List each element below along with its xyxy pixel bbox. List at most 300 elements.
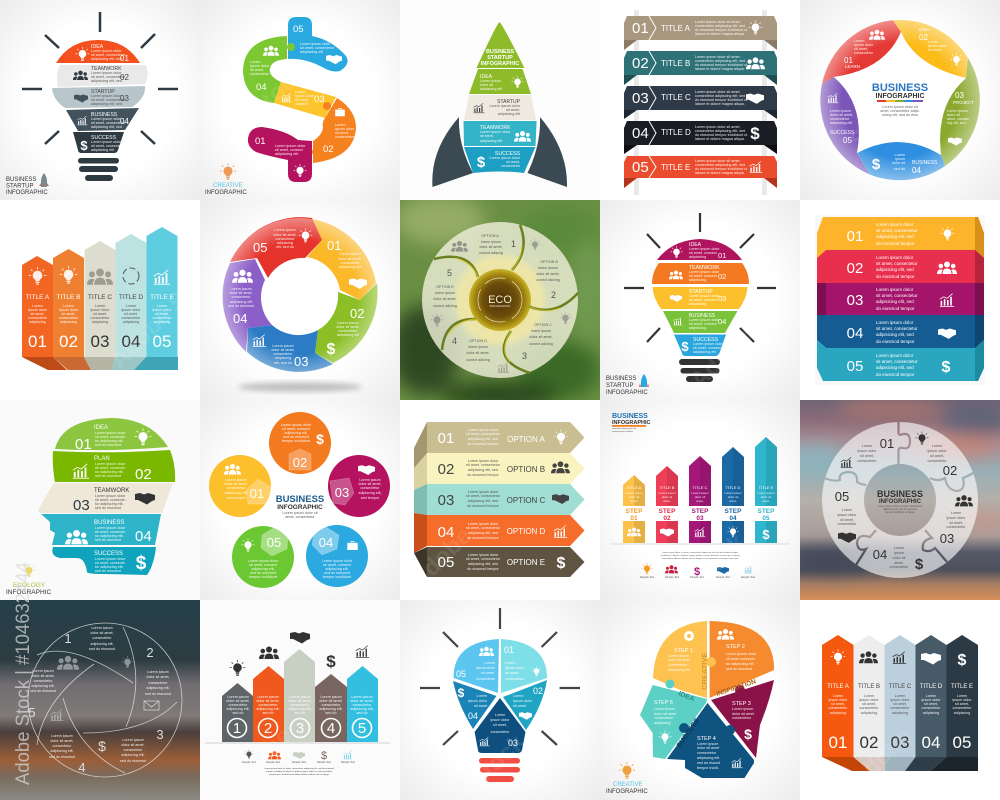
panel: step arrows: eiusmod tempor incididunt (612, 430, 633, 433)
panel: option arrows: OPTION A (507, 435, 546, 444)
panel: head bands: tur adipiscing elit, (95, 565, 124, 569)
panel: dollar sign puzzle: 03 (314, 94, 325, 105)
panel: step arrows: 01 (630, 515, 638, 522)
panel: five circles: 01 (250, 486, 264, 501)
band 01: 01 (847, 228, 863, 245)
panel: eco swirl on green background: dolor sit amet, (536, 272, 560, 276)
panel: pie bulb: 01 (504, 645, 514, 655)
panel: puzzle ring on sunset: consectetur (889, 565, 909, 569)
panel: option arrows (414, 422, 584, 577)
panel: tall arrows: sit amet, (862, 702, 876, 706)
panel: pie bulb: consectetur (476, 677, 496, 681)
ribbon 05 (624, 156, 777, 188)
panel: house arrows: sed do (325, 711, 337, 715)
panel: business startup bulb: adipisicing elit, sed (91, 79, 122, 83)
panel: star ring: ipsum dolor (928, 44, 948, 48)
panel: step arrows: Lorem ipsum (757, 491, 775, 495)
panel: line ring on dusk background: consectetur (92, 636, 112, 640)
panel: head puzzle: adipiscing (654, 721, 670, 725)
panel: eco swirl on green background (400, 200, 600, 400)
panel: house arrows: adipiscing elit, (256, 707, 280, 711)
panel: tall arrows: TITLE B (858, 684, 880, 690)
panel: business startup bulb: 01 (120, 54, 129, 63)
ribbon 05: Lorem ipsum dolor sit amet, (695, 159, 740, 163)
panel: line ring on dusk background: dolor sit amet, (146, 675, 170, 679)
panel: business startup bulb: sit amet, consectetur (91, 144, 126, 148)
panel: five rising arrows: adipiscing (92, 320, 108, 324)
panel: business startup bulb: adipisicing elit, sed (91, 57, 122, 61)
panel: head puzzle: CREATIVE (700, 653, 709, 690)
panel: house arrows: Lorem ipsum (227, 695, 249, 699)
panel: five rising arrows: Lorem (126, 304, 136, 308)
panel: arrow ring: consectetur (275, 237, 295, 241)
panel: head bands: 02 (135, 466, 152, 483)
panel: five circles: sit amet, consect (249, 563, 277, 567)
panel: head puzzle: INFOGRAPHIC (606, 789, 648, 795)
panel: five rising arrows: 04 (122, 332, 140, 351)
panel: step arrows: STEP (659, 508, 676, 515)
panel: colored bulb: BUSINESS (689, 313, 716, 319)
panel: head puzzle: Lorem ipsum (668, 654, 689, 658)
panel: head bands: PLAN (94, 456, 110, 462)
panel: option arrows: Lorem ipsum dolor (468, 553, 499, 557)
panel: line ring on dusk background: Lorem ipsum (122, 738, 144, 742)
panel: eco swirl on green background: conect adipcig (479, 251, 503, 255)
panel: house arrows: adipiscing elit, (350, 707, 374, 711)
panel: five circles: sed do eiusmod (250, 571, 276, 575)
panel: arrow ring: adipiscing (275, 356, 291, 360)
panel: five circles: Lorem ipsum dolor (281, 423, 312, 427)
panel: option arrows: OPTION C (507, 496, 546, 505)
panel: head bands: 04 (135, 528, 152, 545)
panel: pie bulb: 03 (508, 738, 518, 748)
panel: five rising arrows: adipiscing (123, 320, 139, 324)
panel: star ring: dolor sit (947, 113, 960, 117)
panel: step arrows: Lorem ipsum (691, 491, 709, 495)
panel: tall arrows: consectetur (828, 706, 848, 710)
watermark: diagonal stock marks: Adobe (225, 722, 297, 794)
panel: five rising arrows: Lorem (95, 304, 105, 308)
panel: pie bulb: sit amet (513, 704, 526, 708)
panel: arrow ring (221, 217, 379, 392)
watermark: diagonal stock marks: Adobe (845, 722, 917, 794)
panel: head puzzle: CREATIVE (613, 782, 643, 788)
panel: arrow ring: elit, sed do (274, 361, 292, 365)
panel: rocket: sit amet, (506, 108, 520, 112)
panel: step arrows: $ (694, 566, 700, 578)
panel: five rising arrows: ipsum dolor (90, 308, 110, 312)
panel: tall arrows: adipiscing (923, 711, 939, 715)
panel: step arrows: 04 (729, 515, 737, 522)
panel: five circles: dolor sit amet, (358, 482, 382, 486)
panel: colored bulb: 02 (718, 272, 726, 281)
panel: arrow ring: consectetur (273, 352, 293, 356)
panel: five rising arrows: ipsum dolor (28, 308, 48, 312)
panel: option arrows: sit amet, consectetur (466, 557, 501, 561)
panel: rocket: IDEA (480, 74, 493, 80)
ribbon 01: Lorem ipsum dolor sit amet, (695, 20, 740, 24)
panel: star ring: amet, consec (947, 117, 969, 121)
panel: star ring: Lorem ipsum (947, 109, 968, 113)
panel: colored bulb: BUSINESS (606, 376, 636, 382)
panel: five rising arrows: 05 (153, 332, 171, 351)
band 03: Lorem ipsum dolor (876, 287, 914, 292)
panel: step arrows: amet, (729, 499, 737, 503)
ribbon 05: 05 (632, 159, 649, 176)
panel: step arrows: TITLE B (660, 485, 675, 490)
panel: rocket: SUCCESS (495, 151, 521, 157)
panel: puzzle ring on sunset: sit amet, (860, 454, 874, 458)
ribbon 02: Lorem ipsum dolor sit amet, (695, 55, 740, 59)
panel: head bands: Lorem ipsum dolor (95, 494, 126, 498)
panel: step arrows: consectetur adipiscing elit sed (612, 427, 636, 430)
panel: business startup bulb: sit amet, consectetur (91, 121, 126, 125)
panel: eco swirl on green background: 5 (447, 268, 452, 278)
panel: tall arrows: adipiscing (861, 711, 877, 715)
panel: pie bulb: sit amet, (505, 671, 519, 675)
panel: tall arrows: Lorem (895, 694, 905, 698)
panel: puzzle ring on sunset (785, 400, 1000, 600)
panel: five rising arrows: sit amet, (155, 312, 169, 316)
panel: five circles: consectetur (226, 486, 246, 490)
panel: line ring on dusk background: 5 (28, 705, 36, 720)
panel: rocket: sit amet, (480, 134, 494, 138)
panel: tall arrows: ipsum dolor (859, 698, 879, 702)
panel: head bands: sit amet, consecte- (95, 466, 127, 470)
panel: rocket (432, 22, 567, 187)
panel: line ring on dusk background: adipiscing elit, (121, 753, 145, 757)
ribbon 02: TITLE B (661, 59, 690, 68)
panel: rocket: Lorem ipsum dolor (489, 104, 521, 108)
panel: house arrows: Lorem ipsum (351, 695, 373, 699)
panel: step arrows: TITLE A (627, 485, 642, 490)
panel: step arrows: Lorem ipsum (724, 491, 742, 495)
panel: step arrows: TITLE E (759, 485, 774, 490)
panel: five circles: tempor incididunt (323, 575, 351, 579)
panel: head puzzle: dolor sit amet (732, 712, 754, 716)
band 03: do eiusmod tempor (876, 306, 915, 311)
ribbon 04: do eiusmod tempor incididunt ut (695, 133, 747, 137)
band 03: adipisicing elit, sed (876, 299, 914, 304)
panel: arrow ring: Lorem ipsum (274, 228, 296, 232)
panel: star ring: sit amet, (854, 47, 868, 51)
panel: line ring on dusk background: $ (98, 738, 106, 754)
panel: head puzzle: tur adipiscing elit (726, 662, 753, 666)
band 02: adipisicing elit, sed (876, 267, 914, 272)
panel: five rising arrows: 01 (28, 332, 47, 351)
panel: tall arrows: sit amet, (955, 702, 969, 706)
panel: head bands: sit amet, consecte- (95, 530, 127, 534)
panel: dollar sign puzzle: CREATIVE (213, 183, 243, 189)
panel: pie bulb: ipsum dolor (490, 718, 510, 722)
panel: tall arrows: Lorem (864, 694, 874, 698)
panel: line ring on dusk background: consectetur (52, 744, 72, 748)
band 02: 02 (847, 260, 863, 277)
panel: eco swirl on green background: OPTION E (436, 285, 454, 289)
panel: tall arrows: $ (958, 652, 967, 669)
panel: puzzle ring on sunset: sit amet, (840, 518, 854, 522)
panel: eco swirl on green background: OPTION A (481, 234, 499, 238)
panel: puzzle ring on sunset: ipsum dolor (927, 449, 947, 453)
panel: head puzzle: consectetur (697, 751, 717, 755)
panel: business startup bulb: $ (80, 138, 88, 153)
panel: head puzzle: Lorem ipsum (697, 742, 718, 746)
band 05: sit amet, consectetur (876, 359, 918, 364)
panel: head bands: sed do eiusmod (95, 538, 121, 542)
panel: rocket: adipiscing elit (480, 87, 502, 91)
panel: five circles: 03 (335, 485, 349, 500)
ribbon 03: do eiusmod tempor incididunt ut (695, 98, 747, 102)
panel: five rising arrows: Lorem (32, 304, 43, 308)
panel: line ring on dusk background: Lorem ipsum (32, 669, 54, 673)
panel: eco swirl on green background: OPTION C (534, 323, 552, 327)
panel: head puzzle: dolor sit amet (654, 712, 676, 716)
panel: puzzle ring on sunset: dolor sit (893, 556, 905, 560)
panel: star ring: INFOGRAPHIC (876, 93, 924, 100)
panel: tall arrows: ipsum dolor (952, 698, 972, 702)
band 02: sit amet, consectetur (876, 261, 918, 266)
panel: arrow ring: sed do eiusmod (228, 304, 254, 308)
panel: five rising arrows: Lorem (63, 304, 74, 308)
panel: step arrows (610, 413, 790, 579)
panel: puzzle ring on sunset: Lorem (862, 444, 872, 448)
panel: house arrows: adipiscing elit, (319, 707, 343, 711)
panel: tall arrows: 01 (829, 733, 847, 752)
panel: dollar sign puzzle: INFOGRAPHIC (205, 190, 247, 196)
panel: star ring: Lorem (928, 40, 938, 44)
band 01 (817, 217, 984, 258)
panel: pie bulb: Lorem (495, 713, 505, 717)
panel: pie bulb (420, 608, 580, 782)
panel: head bands: sed do eiusmod (95, 443, 121, 447)
panel: business startup bulb: Lorem ipsum dolor (91, 94, 122, 98)
band 03: sit amet, consectetur (876, 293, 918, 298)
panel: colored bulb: INFOGRAPHIC (606, 390, 648, 396)
panel: house arrows: 3 (296, 720, 304, 737)
panel: colored bulb: Lorem ipsum dolor (689, 294, 720, 298)
panel: dollar sign puzzle: sit amet, consect (275, 148, 303, 152)
panel: dollar sign puzzle: 01 (255, 136, 266, 147)
panel: five circles: consectetur (360, 486, 380, 490)
panel: head puzzle: tempor incidi- (697, 766, 720, 770)
panel: line ring on dusk background: Lorem ipsum (51, 734, 73, 738)
panel: puzzle ring on sunset: Lorem (894, 546, 904, 550)
panel: step arrows: dolor sit (728, 495, 738, 499)
panel: star ring: dolor sit amet, (830, 113, 853, 117)
panel: eco swirl on green background: dolor sit amet, (433, 297, 457, 301)
panel: puzzle ring on sunset: ipsum dolor (946, 516, 966, 520)
panel: dollar sign puzzle: consect (295, 102, 308, 106)
panel: rocket: Lorem ipsum dolor (480, 130, 511, 134)
panel: house arrows: Sample Text (317, 760, 331, 764)
panel: five circles: adipiscing elit, (224, 491, 248, 495)
ribbon 04: 04 (632, 125, 649, 142)
panel: dollar sign puzzle: ipsum dolor (295, 94, 315, 98)
panel: option arrows: sit amet, consectetur (466, 463, 501, 467)
panel: five circles: tempor incididunt (282, 439, 310, 443)
panel: puzzle ring on sunset: sit amet, (949, 521, 963, 525)
panel: option arrows: $ (557, 555, 566, 572)
panel: dollar sign puzzle: adipisicing elit (275, 152, 298, 156)
panel: pie bulb: 02 (533, 686, 543, 696)
ribbon 02: do eiusmod tempor incididunt ut (695, 63, 747, 67)
panel: line ring on dusk background: sed do eiusmod (30, 689, 56, 693)
panel: option arrows: sit amet, consectetur (466, 526, 501, 530)
panel: five rising arrows: consectetur (152, 316, 172, 320)
panel: pie bulb: consectetur (505, 677, 525, 681)
panel: option arrows: adipiscing elit, sed (468, 531, 498, 535)
panel: colored bulb: Lorem ipsum dolor (689, 270, 720, 274)
panel: pie bulb: Lorem (477, 694, 487, 698)
panel: head puzzle: SUCCESS (676, 717, 701, 749)
panel: star ring: BUSINESS (872, 82, 928, 94)
panel: five rising arrows: TITLE C (88, 294, 112, 301)
panel: star ring: IDEA (919, 27, 930, 32)
panel: five circles: adipiscing elit, (325, 567, 349, 571)
panel: five circles (209, 412, 390, 588)
panel: puzzle ring on sunset: ipsum dolor (837, 513, 857, 517)
watermark: diagonal stock marks: Adobe Stock (105, 251, 228, 374)
panel: head bands: Lorem ipsum dolor (95, 557, 126, 561)
panel: house arrows: sed do (262, 711, 274, 715)
panel: dollar sign puzzle: 05 (293, 24, 304, 35)
panel: pie bulb: $ (458, 686, 465, 700)
ribbon 04: labore et dolore magna aliqua. (695, 137, 745, 141)
panel: house arrows: adipiscing elit, (288, 707, 312, 711)
panel: five rising arrows: TITLE B (57, 294, 80, 301)
panel: pie bulb: sit amet, (481, 671, 495, 675)
panel: option arrows: 03 (438, 492, 454, 509)
panel: option arrows: Lorem ipsum dolor (468, 490, 499, 494)
watermark: diagonal stock marks: Adobe Stock (685, 271, 808, 394)
panel: business startup bulb: Lorem ipsum dolor (91, 140, 122, 144)
panel: eco swirl on green background: 1 (511, 239, 516, 249)
panel: star ring: 02 (919, 33, 928, 42)
panel: tall arrows: consectetur (921, 706, 941, 710)
panel: five rising arrows: Lorem (157, 304, 167, 308)
panel: business startup bulb: sit amet, consectetur (91, 53, 126, 57)
panel: star ring: ipsum (895, 157, 905, 161)
panel: house arrows: adipiscing elit, (226, 707, 250, 711)
panel: house arrows: Lorem ipsum dolor sit amet, consectetur adipiscing elit, sed do eiusmod (264, 767, 334, 770)
panel: head puzzle: consectetur (668, 663, 688, 667)
panel: five rising arrows: sit amet, (31, 312, 44, 316)
ribbon 03 (624, 86, 777, 119)
panel: five rising arrows: adipiscing (29, 320, 46, 324)
panel: eco swirl on green background: dolor sit amet, (466, 351, 490, 355)
panel: tall arrows: Lorem (926, 694, 936, 698)
panel: star ring: Lorem (854, 39, 864, 43)
panel: step arrows: Lorem ipsum dolor sit amet, consectetur adipiscing elit sed do eiusmod tempor (662, 551, 738, 554)
panel: step arrows: incididunt ut labore et dolore magna aliqua ut enim ad minim veniam quis nostrud (661, 554, 740, 557)
panel: colored bulb: adipisicing (689, 278, 706, 282)
panel: step arrows: Lorem ipsum (625, 491, 643, 495)
band 02 (817, 250, 984, 283)
panel: step arrows: dolor sit (761, 495, 771, 499)
panel: five circles: Lorem ipsum dolor sit (282, 511, 318, 515)
panel: option arrows: Lorem ipsum dolor (468, 428, 499, 432)
panel: five rising arrows: sit amet, (124, 312, 138, 316)
panel: arrow ring: dolor sit amet, (338, 257, 362, 261)
ribbon 01: 01 (632, 20, 649, 37)
panel: puzzle ring on sunset: tempor incididunt ut labore (885, 511, 915, 514)
panel: eco swirl on green background: 4 (452, 336, 457, 346)
panel: line ring on dusk background: 2 (146, 645, 154, 660)
band 04: adipisicing elit, sed (876, 332, 914, 337)
panel: arrow ring: dolor sit amet, (229, 291, 253, 295)
panel: tall arrows: adipiscing (892, 711, 908, 715)
panel: arrow ring: adipiscing elit (337, 333, 359, 337)
panel: line ring on dusk background: dolor sit amet, (31, 674, 55, 678)
band 03 (817, 283, 984, 315)
panel: five rising arrows: ipsum dolor (59, 308, 79, 312)
panel: eco swirl on green background: INFOGRAPHIC (490, 304, 511, 308)
ribbon 05: TITLE E (661, 163, 690, 172)
panel: head puzzle: STEP 2 (726, 644, 745, 650)
panel: five circles: amet, consectetur (285, 515, 315, 519)
panel: five rising arrows: consectetur (121, 316, 141, 320)
panel: puzzle ring on sunset: Lorem (932, 444, 942, 448)
panel: tall arrows: TITLE C (889, 684, 912, 690)
panel: five circles: 02 (293, 455, 307, 470)
panel: house arrows: sed do (294, 711, 306, 715)
panel: colored bulb: 04 (718, 317, 726, 326)
panel: step arrows: BUSINESS (612, 413, 648, 420)
panel: five rising arrows: 02 (59, 332, 78, 351)
ribbon 03: Lorem ipsum dolor sit amet, (695, 90, 740, 94)
panel: line ring on dusk background: consectetur (123, 748, 143, 752)
panel: five rising arrows: ipsum dolor (152, 308, 172, 312)
panel: head bands: INFOGRAPHIC (6, 589, 51, 596)
panel: pie bulb: sit amet, (493, 723, 507, 727)
panel: house arrows: consectetur (290, 703, 310, 707)
panel: dollar sign puzzle: Lorem (335, 123, 345, 127)
panel: tall arrows: consectetur (890, 706, 910, 710)
panel: five rising arrows: consectetur (90, 316, 110, 320)
panel: eco swirl on green background: lorem ipsum (435, 291, 455, 295)
watermark: diagonal stock marks: Adobe (405, 522, 477, 594)
panel: business startup bulb (6, 12, 178, 196)
panel: house arrows: dolor sit amet, (288, 699, 312, 703)
ribbon 02: 02 (632, 55, 649, 72)
ribbon 01: TITLE A (661, 24, 691, 33)
panel: star ring: amet, consectetur adipi- (880, 109, 920, 113)
panel: house arrows: Lorem ipsum (320, 695, 342, 699)
panel: colored bulb: sit amet, consect (689, 251, 717, 255)
panel: dollar sign puzzle: 04 (256, 82, 267, 93)
panel: colored bulb: 03 (718, 294, 726, 303)
panel: puzzle ring on sunset: BUSINESS (877, 489, 923, 499)
panel: puzzle ring on sunset: 03 (940, 531, 954, 546)
panel: house arrows: dolor sit amet, (350, 699, 374, 703)
panel: head bands: $ (136, 553, 147, 574)
ribbon 01: labore et dolore magna aliqua. (695, 32, 745, 36)
panel: rocket: consectetur (501, 164, 521, 168)
band 02: Lorem ipsum dolor (876, 255, 914, 260)
panel: puzzle ring on sunset: sit amet, (930, 454, 944, 458)
panel: step arrows: Sample Text (640, 575, 654, 579)
panel: house arrows: 4 (327, 720, 335, 737)
panel: head bands: sed do eiusmod (95, 569, 121, 573)
panel: tall arrows: Lorem (957, 694, 967, 698)
panel: pie bulb: sit amet (474, 704, 487, 708)
panel: puzzle ring on sunset: Lorem ipsum dolor sit amet, consectetur (878, 505, 922, 508)
panel: star ring: LEARN (845, 64, 860, 69)
panel: option arrows: OPTION E (507, 558, 545, 567)
panel: rocket: INFOGRAPHIC (481, 61, 519, 67)
panel: star ring: 03 (955, 91, 964, 100)
panel: star ring (820, 20, 980, 180)
